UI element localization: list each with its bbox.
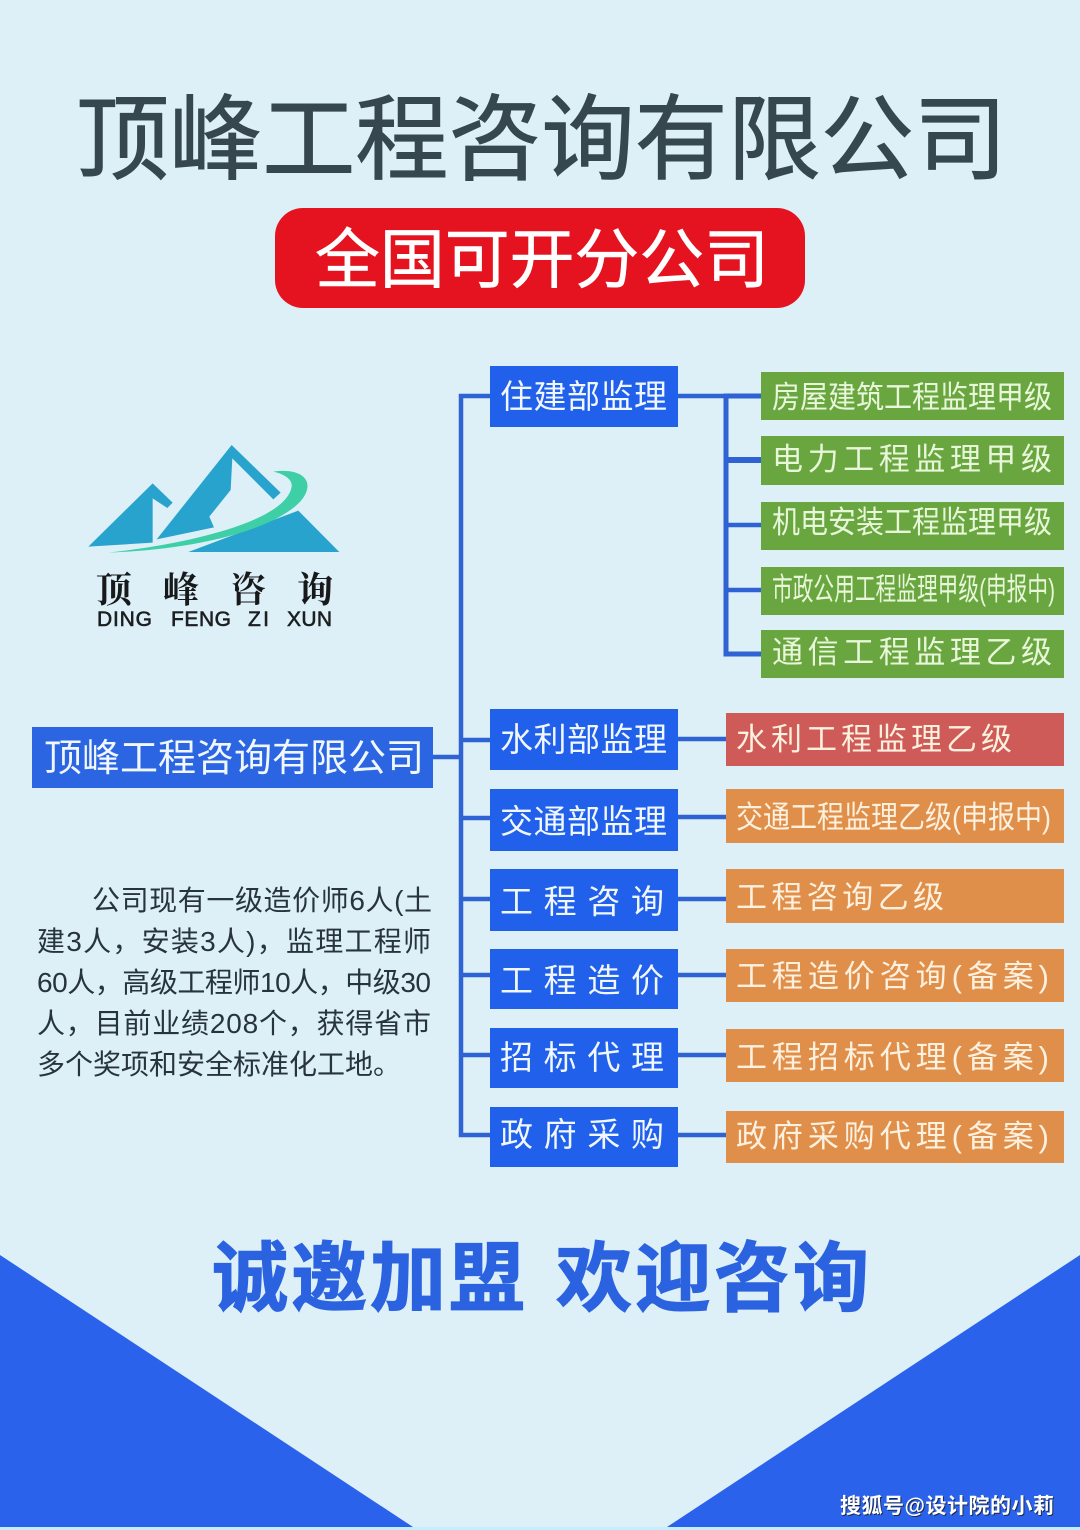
qualification: 市政公用工程监理甲级(申报中) <box>761 567 1064 615</box>
logo <box>88 445 339 631</box>
qualification: 工程咨询乙级 <box>726 869 1064 923</box>
department: 工程造价 <box>490 949 678 1009</box>
logo pinyin name: FENG <box>171 608 231 631</box>
qualification: 通信工程监理乙级 <box>761 630 1064 678</box>
slogan: 诚邀加盟 <box>212 1237 525 1322</box>
qualification: 政府采购代理(备案) <box>726 1111 1064 1163</box>
icon: mountains <box>88 445 339 553</box>
qualification: 政府采购代理(备案): 政府采购代理(备案) <box>736 1119 1049 1154</box>
qualification: 工程招标代理(备案): 工程招标代理(备案) <box>736 1040 1049 1075</box>
company description: 60人，高级工程师10人，中级30 <box>37 967 431 998</box>
logo pinyin name: XUN <box>287 608 332 631</box>
root node <box>32 727 433 788</box>
qualification: 机电安装工程监理甲级: 机电安装工程监理甲级 <box>772 505 1052 540</box>
logo pinyin name <box>97 608 332 631</box>
department: 政府采购: 政府采购 <box>500 1116 664 1153</box>
department: 政府采购 <box>490 1107 678 1167</box>
department: 工程咨询 <box>490 869 678 931</box>
qualification: 交通工程监理乙级(申报中) <box>726 789 1064 843</box>
department: 住建部监理 <box>490 366 678 427</box>
org chart connectors <box>433 396 761 1135</box>
department: 水利部监理 <box>490 709 678 770</box>
qualification: 水利工程监理乙级 <box>726 713 1064 766</box>
qualification: 工程招标代理(备案) <box>726 1029 1064 1082</box>
department: 住建部监理: 住建部监理 <box>500 378 667 415</box>
qualification: 工程造价咨询(备案) <box>726 949 1064 1002</box>
company description: 公司现有一级造价师6人(土 <box>92 885 432 916</box>
logo pinyin name: ZI <box>248 608 269 631</box>
subtitle pill: 全国可开分公司 <box>315 223 769 296</box>
department: 交通部监理: 交通部监理 <box>500 803 667 840</box>
department: 交通部监理 <box>490 789 678 851</box>
bottom right blue triangle <box>667 1255 1080 1527</box>
watermark: 搜狐号@设计院的小莉 <box>840 1494 1054 1518</box>
logo chinese name: 询 <box>297 570 333 610</box>
department: 招标代理: 招标代理 <box>500 1039 664 1076</box>
company description: 建3人，安装3人)，监理工程师 <box>37 926 431 957</box>
root node: 顶峰工程咨询有限公司 <box>44 738 424 780</box>
qualification: 电力工程监理甲级 <box>761 436 1064 485</box>
bottom left blue triangle <box>0 1255 413 1527</box>
logo chinese name: 咨 <box>230 570 266 610</box>
qualification: 水利工程监理乙级: 水利工程监理乙级 <box>736 722 1012 757</box>
qualification: 通信工程监理乙级: 通信工程监理乙级 <box>772 635 1052 670</box>
subtitle pill <box>275 208 805 308</box>
logo chinese name <box>96 570 333 610</box>
qualification: 机电安装工程监理甲级 <box>761 502 1064 550</box>
department: 水利部监理: 水利部监理 <box>500 721 667 758</box>
department: 工程咨询: 工程咨询 <box>500 883 664 920</box>
qualification: 电力工程监理甲级: 电力工程监理甲级 <box>772 442 1052 477</box>
qualification: 房屋建筑工程监理甲级: 房屋建筑工程监理甲级 <box>772 380 1052 415</box>
slogan <box>212 1237 869 1322</box>
company description <box>37 885 432 1080</box>
qualification: 工程咨询乙级: 工程咨询乙级 <box>736 880 944 915</box>
qualification: 房屋建筑工程监理甲级 <box>761 372 1064 420</box>
logo chinese name: 顶 <box>96 570 134 610</box>
company description: 人，目前业绩208个，获得省市 <box>37 1008 431 1039</box>
slogan: 欢迎咨询 <box>556 1237 869 1322</box>
department: 招标代理 <box>490 1028 678 1088</box>
qualification: 工程造价咨询(备案): 工程造价咨询(备案) <box>736 959 1049 994</box>
logo pinyin name: DING <box>97 608 152 631</box>
logo chinese name: 峰 <box>163 570 199 610</box>
company description: 多个奖项和安全标准化工地。 <box>37 1049 401 1080</box>
watermark: 搜狐号@设计院的小莉 <box>841 1495 1055 1519</box>
department: 工程造价: 工程造价 <box>500 962 664 999</box>
title: 顶峰工程咨询有限公司 <box>76 88 1007 192</box>
